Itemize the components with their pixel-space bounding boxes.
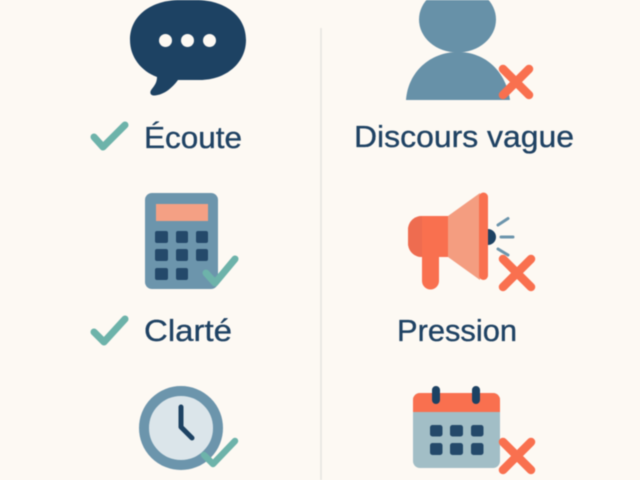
- label: Écoute: Écoute: [144, 120, 242, 155]
- icon: speech bubble: [130, 0, 246, 96]
- icon: calculator with check: [145, 193, 235, 289]
- label: Clarté: Clarté: [144, 313, 232, 348]
- icon: person with cross: [406, 0, 529, 100]
- check mark: Clarté: [94, 319, 125, 342]
- icon: clock with check: [144, 391, 235, 465]
- icon: megaphone with cross: [408, 192, 531, 290]
- icon: calendar with cross: [413, 390, 531, 470]
- label: Discours vague: Discours vague: [354, 119, 574, 154]
- label: Pression: Pression: [397, 313, 517, 348]
- check mark: Écoute: [94, 125, 125, 147]
